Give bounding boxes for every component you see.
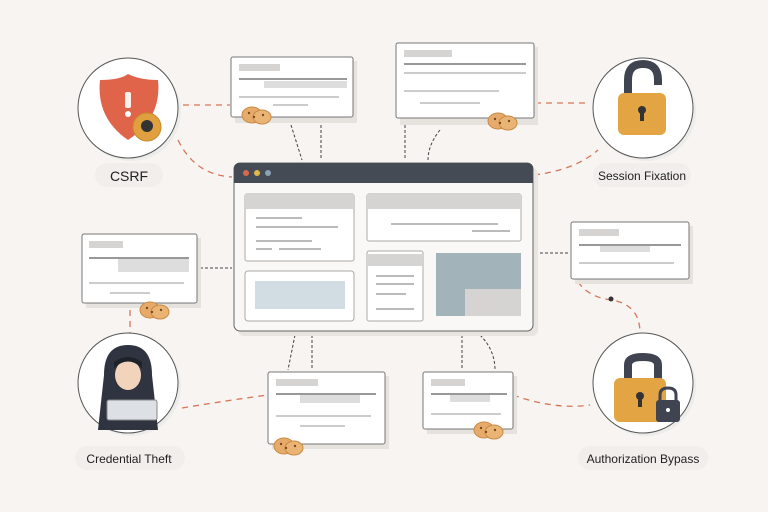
card: left xyxy=(82,234,201,319)
icon: cookies xyxy=(488,113,517,130)
label: CSRF xyxy=(95,163,163,187)
icon: cookies xyxy=(274,438,303,455)
connectors xyxy=(130,103,640,408)
circle: Session Fixation xyxy=(593,58,696,187)
label: Session Fixation xyxy=(593,163,691,187)
label: Credential Theft xyxy=(75,446,185,470)
card: right xyxy=(571,222,693,284)
circle: Session Fixation: Session Fixation xyxy=(598,169,686,183)
card: bottom right xyxy=(423,372,517,439)
circle: Authorization Bypass: Authorization Bypass xyxy=(587,452,699,466)
icon: cookies xyxy=(474,422,503,439)
icon: shield xyxy=(100,74,158,140)
card: top left xyxy=(231,57,357,124)
main browser window xyxy=(234,163,538,336)
icon: cookies xyxy=(140,302,169,319)
icon: hacker xyxy=(98,345,158,430)
circle: CSRF xyxy=(78,58,181,187)
card: top right xyxy=(396,43,538,130)
icon: cookies xyxy=(242,107,271,124)
label: Authorization Bypass xyxy=(578,446,708,470)
icon: open lock xyxy=(628,64,658,95)
circle: Credential Theft xyxy=(75,333,185,470)
circle: Authorization Bypass xyxy=(578,333,708,470)
circle: Credential Theft: Credential Theft xyxy=(86,452,172,466)
card: bottom left xyxy=(268,372,389,455)
icon: lock xyxy=(628,357,658,380)
circle: CSRF: CSRF xyxy=(110,168,148,184)
